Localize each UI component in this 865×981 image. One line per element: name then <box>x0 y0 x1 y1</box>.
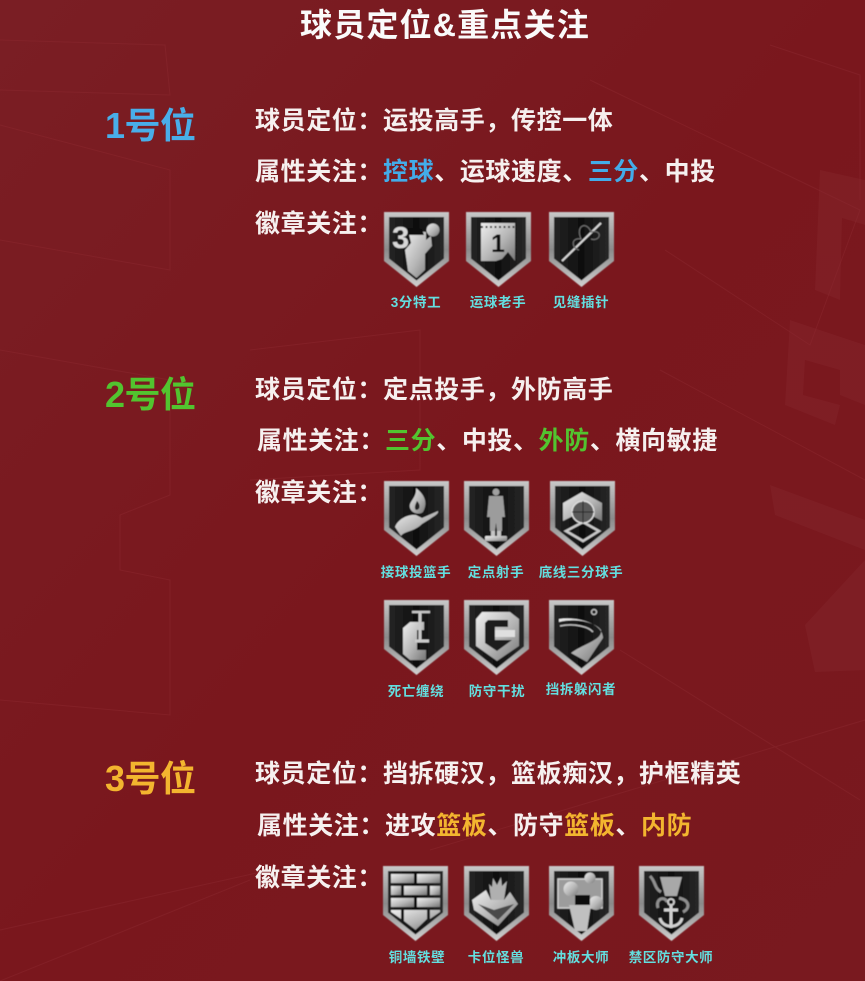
badge: 定点射手 <box>464 481 529 580</box>
badge: 卡位怪兽: 卡位怪兽 <box>468 949 524 965</box>
badge: 见缝插针 <box>549 212 614 310</box>
badge: 禁区防守大师 <box>629 866 713 965</box>
badge: 死亡缠绕: 死亡缠绕 <box>388 683 444 699</box>
heading: 2号位: 2号位 <box>105 374 196 415</box>
panel: position 2 <box>105 374 718 699</box>
badge: 防守干扰 <box>464 600 529 699</box>
badge: 接球投篮手: 接球投篮手 <box>381 564 451 580</box>
badge: 运球老手 <box>466 212 531 310</box>
badge: 底线三分球手: 底线三分球手 <box>539 564 623 580</box>
badge: 铜墙铁壁 <box>383 866 448 965</box>
badge: 禁区防守大师: 禁区防守大师 <box>629 949 713 965</box>
badge: 运球老手: 运球老手 <box>470 294 526 310</box>
badge: 接球投篮手 <box>381 481 451 580</box>
text: attributes 1: 属性关注：控球、运球速度、三分、中投 <box>255 158 716 186</box>
text: attributes 3: 属性关注：进攻篮板、防守篮板、内防 <box>257 812 692 840</box>
heading: 1号位: 1号位 <box>105 105 196 146</box>
badge: 铜墙铁壁: 铜墙铁壁 <box>389 949 445 965</box>
title: 球员定位&重点关注 <box>300 7 590 43</box>
badge: 见缝插针: 见缝插针 <box>553 294 609 310</box>
panel: position 1 <box>105 105 716 310</box>
badge: 3分特工: 3分特工 <box>391 294 441 310</box>
badge: 3分特工 <box>384 212 449 310</box>
heading: 3号位: 3号位 <box>105 758 196 799</box>
badge: 定点射手: 定点射手 <box>468 564 524 580</box>
text: badges heading 2: 徽章关注： <box>255 478 383 507</box>
text: attributes 2: 属性关注：三分、中投、外防、横向敏捷 <box>257 427 718 455</box>
badge: 挡拆躲闪者 <box>546 600 616 697</box>
badge: 挡拆躲闪者: 挡拆躲闪者 <box>546 681 616 697</box>
panel: position 3 <box>105 758 741 965</box>
badge: 底线三分球手 <box>539 481 623 580</box>
text: player role 3: 球员定位：挡拆硬汉，篮板痴汉，护框精英 <box>255 759 741 788</box>
badge: 防守干扰: 防守干扰 <box>469 683 525 699</box>
badge: 死亡缠绕 <box>384 600 449 699</box>
text: player role 2: 球员定位：定点投手，外防高手 <box>255 375 613 404</box>
text: player role 1: 球员定位：运投高手，传控一体 <box>255 106 613 135</box>
text: badges heading 1: 徽章关注： <box>255 209 383 238</box>
badge: 3分特工: 3 <box>392 220 409 255</box>
badge: 运球老手: 1 <box>491 230 505 258</box>
background lettering <box>770 170 865 672</box>
badge: 冲板大师 <box>549 866 614 965</box>
badge: 卡位怪兽 <box>464 866 529 965</box>
text: badges heading 3: 徽章关注： <box>255 863 383 892</box>
badge: 冲板大师: 冲板大师 <box>553 949 609 965</box>
